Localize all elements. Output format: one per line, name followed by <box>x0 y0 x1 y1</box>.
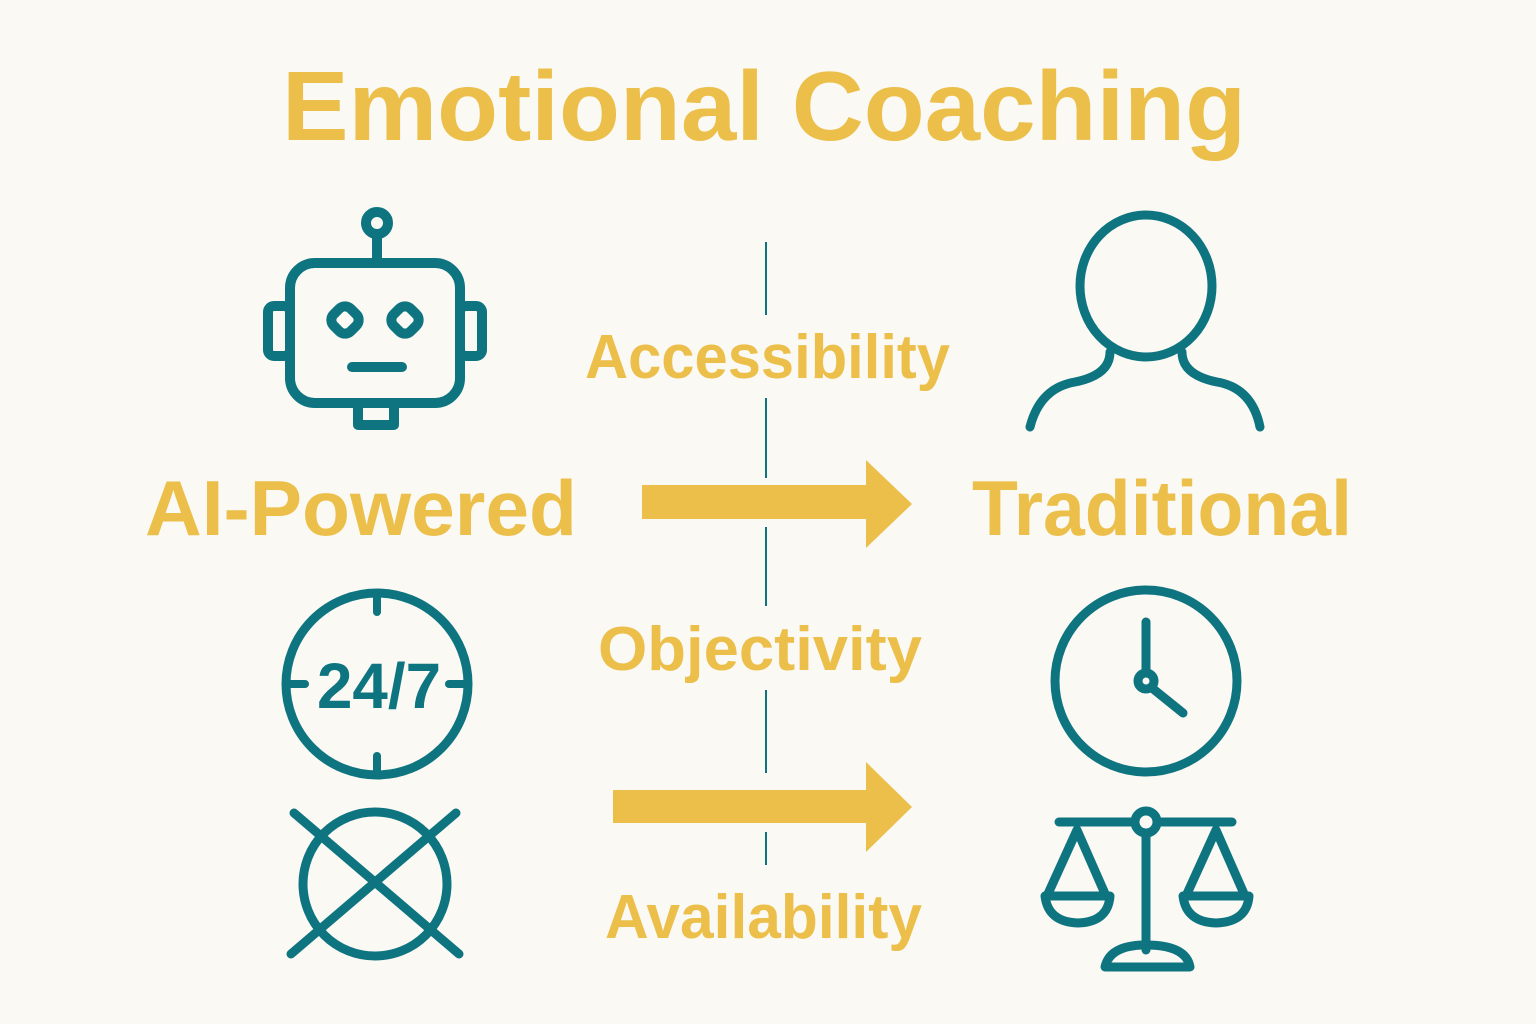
icon: person <box>1030 215 1260 427</box>
icon: robot <box>268 212 482 425</box>
icon: scales <box>1045 811 1249 967</box>
arrow 2 <box>613 762 912 852</box>
label: Traditional: Traditional <box>972 464 1352 552</box>
icon: 24/7 clock <box>286 593 468 775</box>
title: Emotional Coaching <box>282 51 1246 161</box>
label: Objectivity: Objectivity <box>598 615 923 684</box>
arrow 1 <box>642 460 912 548</box>
icon: 24/7 clock: 24/7 <box>317 650 441 722</box>
label: AI-Powered: AI-Powered <box>145 464 577 552</box>
icon: clock <box>1055 590 1237 772</box>
label: Accessibility: Accessibility <box>585 323 950 392</box>
label: Availability: Availability <box>605 883 923 952</box>
icon: crossed circle <box>291 812 459 956</box>
